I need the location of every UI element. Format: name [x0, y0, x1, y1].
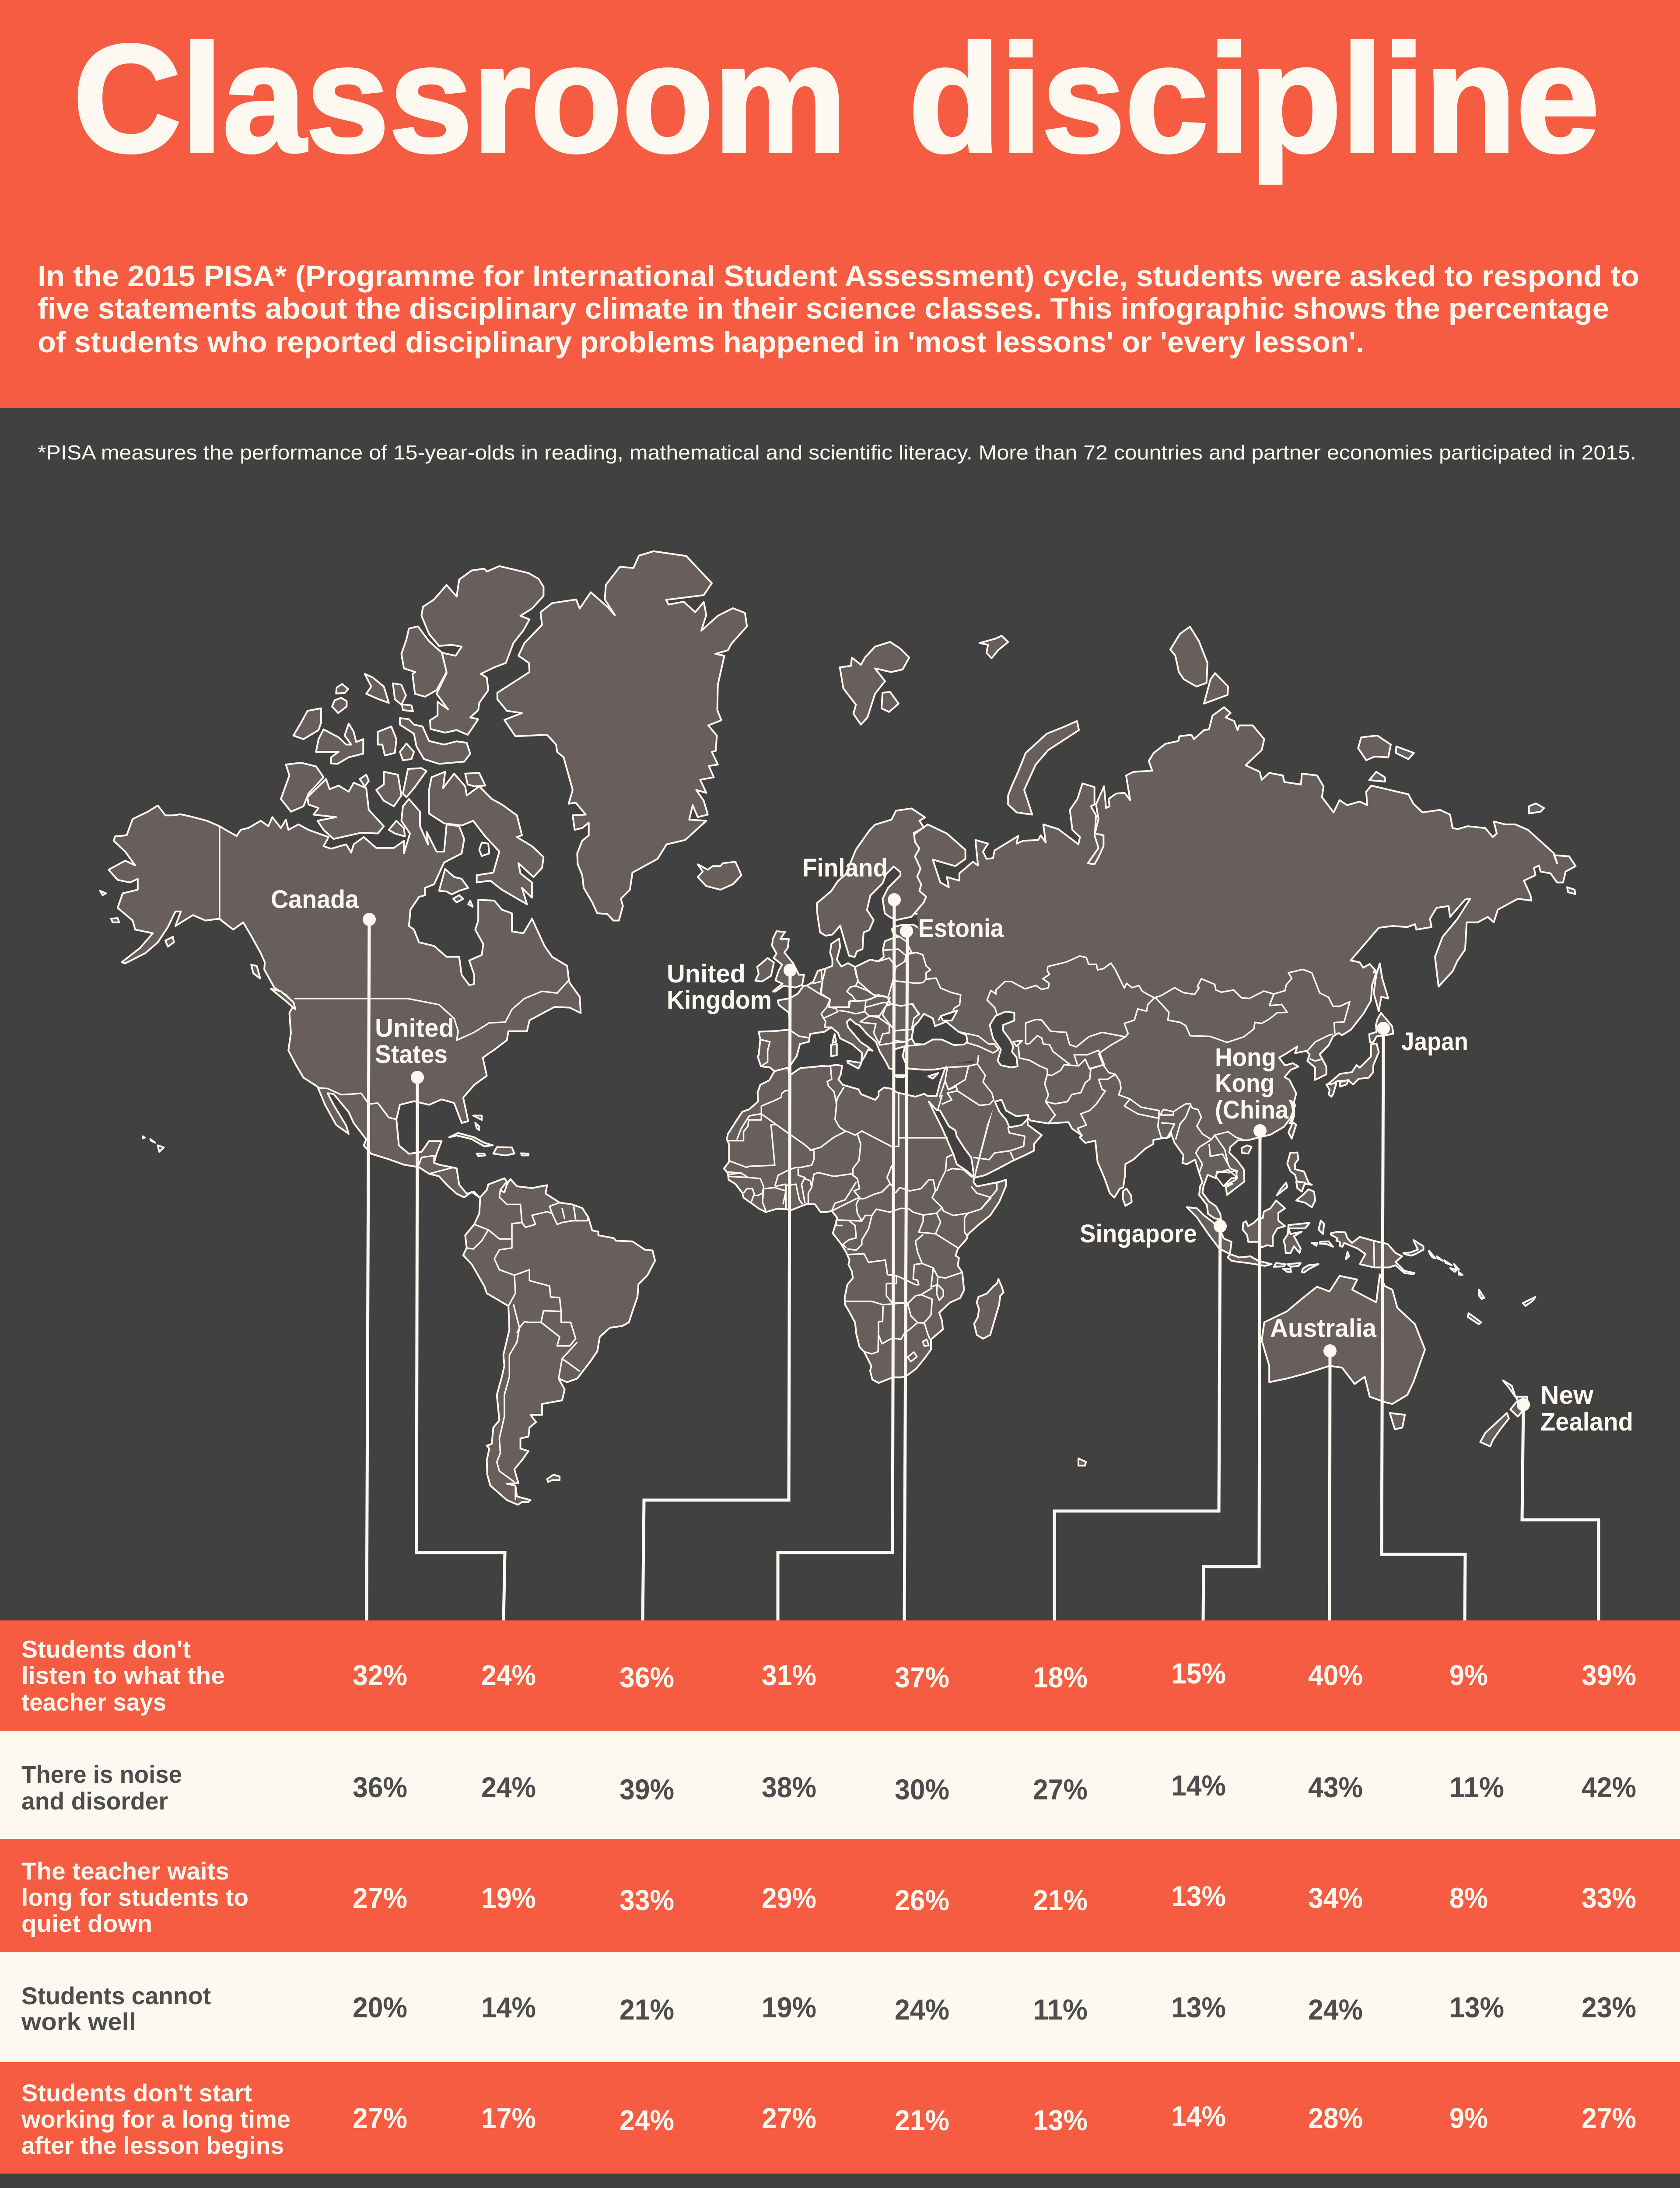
leader: Singapore — [1054, 1220, 1227, 1621]
row: noise and disorder: 43% — [1308, 1771, 1363, 1803]
East and Southeast Asia coast — [1171, 971, 1376, 1220]
country labels: Australia — [1270, 1314, 1377, 1343]
intro text: In the 2015 PISA* (Programme for International Student Assessment) cycle, students were asked to respond to — [38, 259, 1639, 293]
row: teacher waits: 29% — [762, 1882, 816, 1914]
row: cannot work well: 23% — [1582, 1991, 1636, 2023]
row: don't start working: Students don't start — [21, 2079, 252, 2107]
intro text — [38, 259, 1639, 359]
row: cannot work well: 24% — [1308, 1993, 1363, 2026]
leader lines and location dots — [363, 893, 1599, 1621]
country labels: Japan — [1401, 1027, 1468, 1056]
row: cannot work well: 21% — [620, 1993, 674, 2026]
row: cannot work well: 14% — [481, 1991, 536, 2023]
leader: Japan — [1377, 1022, 1465, 1620]
row: teacher waits — [0, 1839, 1680, 1952]
row: students don't listen: 37% — [895, 1661, 949, 1694]
Central America islands and South America — [143, 1115, 655, 1505]
Europe — [756, 808, 985, 1079]
intro text: of students who reported disciplinary problems happened in 'most lessons' or 'every lesson'. — [38, 326, 1364, 359]
row: students don't listen: listen to what the — [21, 1662, 225, 1689]
row: teacher waits: 26% — [895, 1884, 949, 1916]
row: noise and disorder: 27% — [1033, 1773, 1088, 1806]
leader: Hong Kong — [1203, 1124, 1267, 1620]
intro text: five statements about the disciplinary climate in their science classes. This infographic shows the percentage — [38, 292, 1609, 325]
title: discipline — [909, 13, 1600, 185]
row: students don't listen: 18% — [1033, 1661, 1088, 1694]
row: students don't listen: 36% — [620, 1661, 674, 1694]
row: noise and disorder: 38% — [762, 1771, 816, 1803]
row: students don't listen: 24% — [481, 1659, 536, 1691]
row: noise and disorder: 24% — [481, 1771, 536, 1803]
data table — [0, 1620, 1680, 2174]
country labels: Finland — [802, 854, 888, 882]
row: noise and disorder: There is noise — [21, 1760, 182, 1788]
row: don't start working: 21% — [895, 2104, 949, 2136]
row: cannot work well: Students cannot — [21, 1982, 211, 2009]
inland seas: Black Sea, Azov, Caspian — [912, 1010, 1022, 1067]
leader: Finland — [778, 893, 901, 1620]
country labels: Singapore — [1080, 1220, 1197, 1248]
row: cannot work well: 20% — [353, 1991, 407, 2023]
row: noise and disorder: and disorder — [21, 1787, 168, 1815]
world map — [100, 551, 1575, 1505]
row: students don't listen — [0, 1620, 1680, 1731]
country borders: Africa — [727, 1067, 1025, 1362]
row: don't start working: 27% — [353, 2102, 407, 2134]
row: teacher waits: 19% — [481, 1882, 536, 1914]
row: cannot work well — [0, 1952, 1680, 2062]
leader: New Zealand — [1517, 1398, 1599, 1620]
country labels: Kong — [1215, 1069, 1274, 1098]
row: teacher waits: 8% — [1449, 1882, 1488, 1914]
country borders: East Asia and New Guinea — [1270, 969, 1374, 1267]
Asia-Pacific islands — [1187, 1013, 1484, 1299]
row: don't start working: 17% — [481, 2102, 536, 2134]
row: students don't listen: 39% — [1582, 1659, 1636, 1691]
row: cannot work well: 13% — [1449, 1991, 1504, 2023]
Russia and northern Asia — [840, 627, 1575, 1011]
row: don't start working: 14% — [1171, 2100, 1226, 2132]
row: teacher waits: The teacher waits — [21, 1857, 229, 1885]
leader: United Kingdom — [643, 964, 797, 1620]
row: noise and disorder: 11% — [1449, 1771, 1504, 1803]
row: students don't listen: 9% — [1449, 1659, 1488, 1691]
row: don't start working: after the lesson begins — [21, 2132, 284, 2159]
interior land patches — [917, 910, 1373, 1175]
row: don't start working: working for a long time — [21, 2105, 290, 2133]
row: cannot work well: 24% — [895, 1993, 949, 2026]
country borders: South America — [467, 1190, 588, 1500]
country labels: United — [375, 1014, 454, 1042]
title: Classroom — [73, 13, 847, 184]
country labels: Hong — [1215, 1043, 1276, 1072]
row: noise and disorder: 39% — [620, 1773, 674, 1806]
country labels: Estonia — [918, 914, 1004, 943]
row: teacher waits: 13% — [1171, 1880, 1226, 1912]
Australia, New Zealand and Pacific islands — [1078, 1274, 1536, 1466]
row: noise and disorder: 42% — [1582, 1771, 1636, 1803]
country labels: (China) — [1215, 1096, 1296, 1124]
row: students don't listen: 31% — [762, 1659, 816, 1691]
row: don't start working: 24% — [620, 2104, 674, 2136]
North America and Greenland — [100, 551, 747, 1197]
country labels — [271, 854, 1633, 1436]
row: teacher waits: 33% — [620, 1884, 674, 1916]
leader: Canada — [363, 913, 376, 1620]
row: cannot work well: 11% — [1033, 1993, 1088, 2026]
row: students don't listen: Students don't — [21, 1635, 191, 1663]
row: don't start working: 9% — [1449, 2102, 1488, 2134]
row: noise and disorder: 30% — [895, 1773, 949, 1806]
row: cannot work well: 13% — [1171, 1991, 1226, 2023]
row: students don't listen: 40% — [1308, 1659, 1363, 1691]
country labels: United — [667, 960, 746, 988]
row: students don't listen: 32% — [353, 1659, 407, 1691]
country labels: New — [1540, 1381, 1594, 1410]
country borders: Asia — [987, 956, 1287, 1186]
row: noise and disorder: 36% — [353, 1771, 407, 1803]
country labels: States — [375, 1040, 448, 1069]
row: noise and disorder — [0, 1731, 1680, 1839]
header panel — [0, 0, 1680, 408]
country labels: Zealand — [1540, 1408, 1633, 1436]
row: teacher waits: 21% — [1033, 1884, 1088, 1916]
South Asia and Middle East coast — [974, 1030, 1171, 1206]
Africa and Arabia — [724, 1065, 1006, 1383]
row: noise and disorder: 14% — [1171, 1769, 1226, 1802]
title — [73, 13, 1600, 185]
country borders: Europe and Middle East — [760, 936, 999, 1105]
row: students don't listen: teacher says — [21, 1688, 166, 1716]
row: don't start working: 28% — [1308, 2102, 1363, 2134]
row: don't start working: 27% — [762, 2102, 816, 2134]
leader: Australia — [1323, 1344, 1337, 1620]
row: don't start working: 27% — [1582, 2102, 1636, 2134]
row: teacher waits: quiet down — [21, 1910, 152, 1937]
country labels: Canada — [271, 885, 359, 914]
row: teacher waits: 27% — [353, 1882, 407, 1914]
row: cannot work well: 19% — [762, 1991, 816, 2023]
leader: Estonia — [900, 925, 913, 1621]
country borders: North America — [220, 826, 569, 1174]
Red Sea — [929, 1101, 974, 1178]
row: teacher waits: long for students to — [21, 1883, 248, 1911]
row: teacher waits: 34% — [1308, 1882, 1363, 1914]
country labels: Kingdom — [667, 986, 772, 1014]
row: teacher waits: 33% — [1582, 1882, 1636, 1914]
Persian Gulf — [995, 1100, 1029, 1127]
footnote: *PISA measures the performance of 15-year-olds in reading, mathematical and scientific literacy. More than 72 countries and partner economies participated in 2015. — [38, 441, 1636, 464]
row: students don't listen: 15% — [1171, 1657, 1226, 1690]
row: don't start working: 13% — [1033, 2104, 1088, 2136]
leader: United States — [411, 1071, 505, 1620]
row: don't start working — [0, 2062, 1680, 2174]
row: cannot work well: work well — [21, 2008, 136, 2035]
